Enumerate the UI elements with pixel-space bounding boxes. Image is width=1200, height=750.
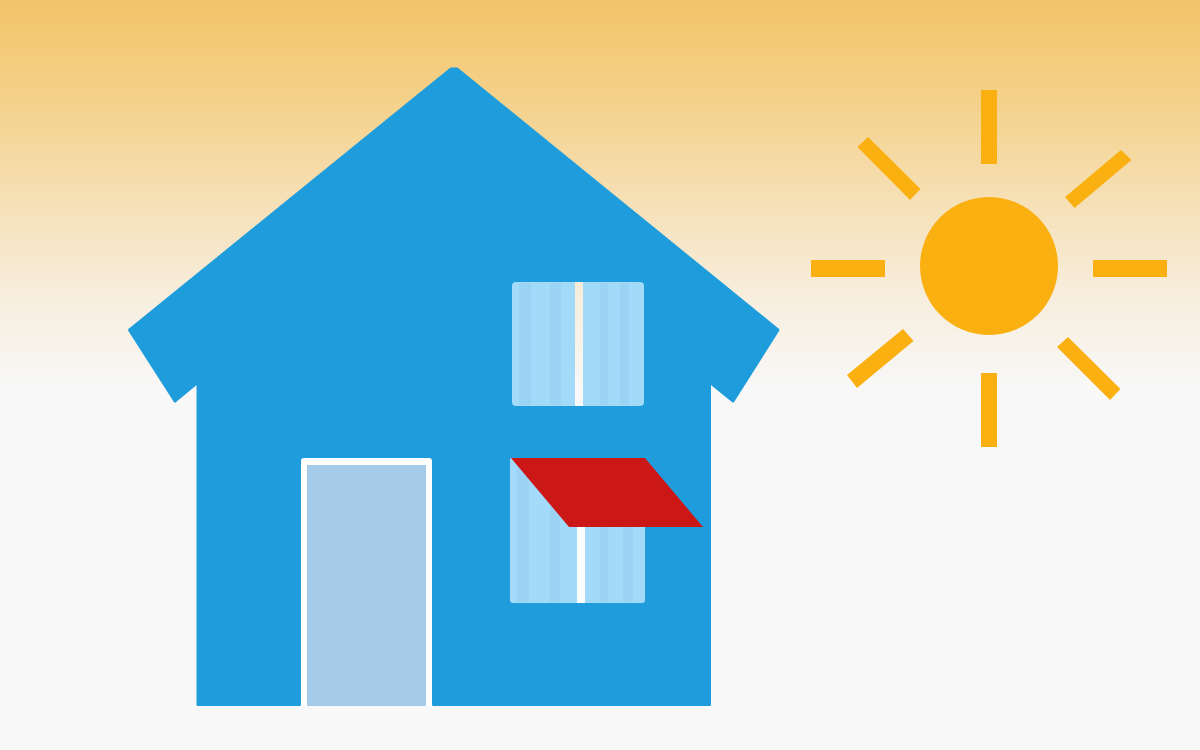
- upper window: [512, 282, 644, 406]
- sun ray: bottom left: [847, 329, 914, 388]
- upper window left pane: [512, 282, 575, 406]
- lower window left pane: [510, 458, 577, 603]
- door: [301, 458, 432, 706]
- sun ray: bottom: [981, 373, 997, 447]
- upper window right pane: [583, 282, 644, 406]
- sun ray: bottom right: [1057, 337, 1120, 400]
- icon: sun: [811, 90, 1167, 447]
- background gradient band: [0, 0, 1200, 388]
- lower window: [510, 458, 645, 603]
- door panel: [307, 465, 426, 706]
- door frame: [301, 458, 432, 706]
- sun ray: top left: [858, 137, 920, 200]
- house: [130, 69, 778, 706]
- upper window centre gap: [575, 282, 583, 406]
- sun ray: top: [981, 90, 997, 164]
- sun ray: right: [1093, 260, 1167, 277]
- lower window centre gap: [577, 500, 585, 603]
- sun ray: left: [811, 260, 885, 277]
- lower window right pane: [585, 458, 645, 603]
- red awning: [511, 458, 703, 527]
- upper window curtain folds: [519, 283, 629, 405]
- lower window curtain folds: [517, 459, 633, 602]
- sun disc: [920, 197, 1058, 335]
- sun ray: top right: [1065, 150, 1132, 208]
- house body and roof: [130, 69, 778, 704]
